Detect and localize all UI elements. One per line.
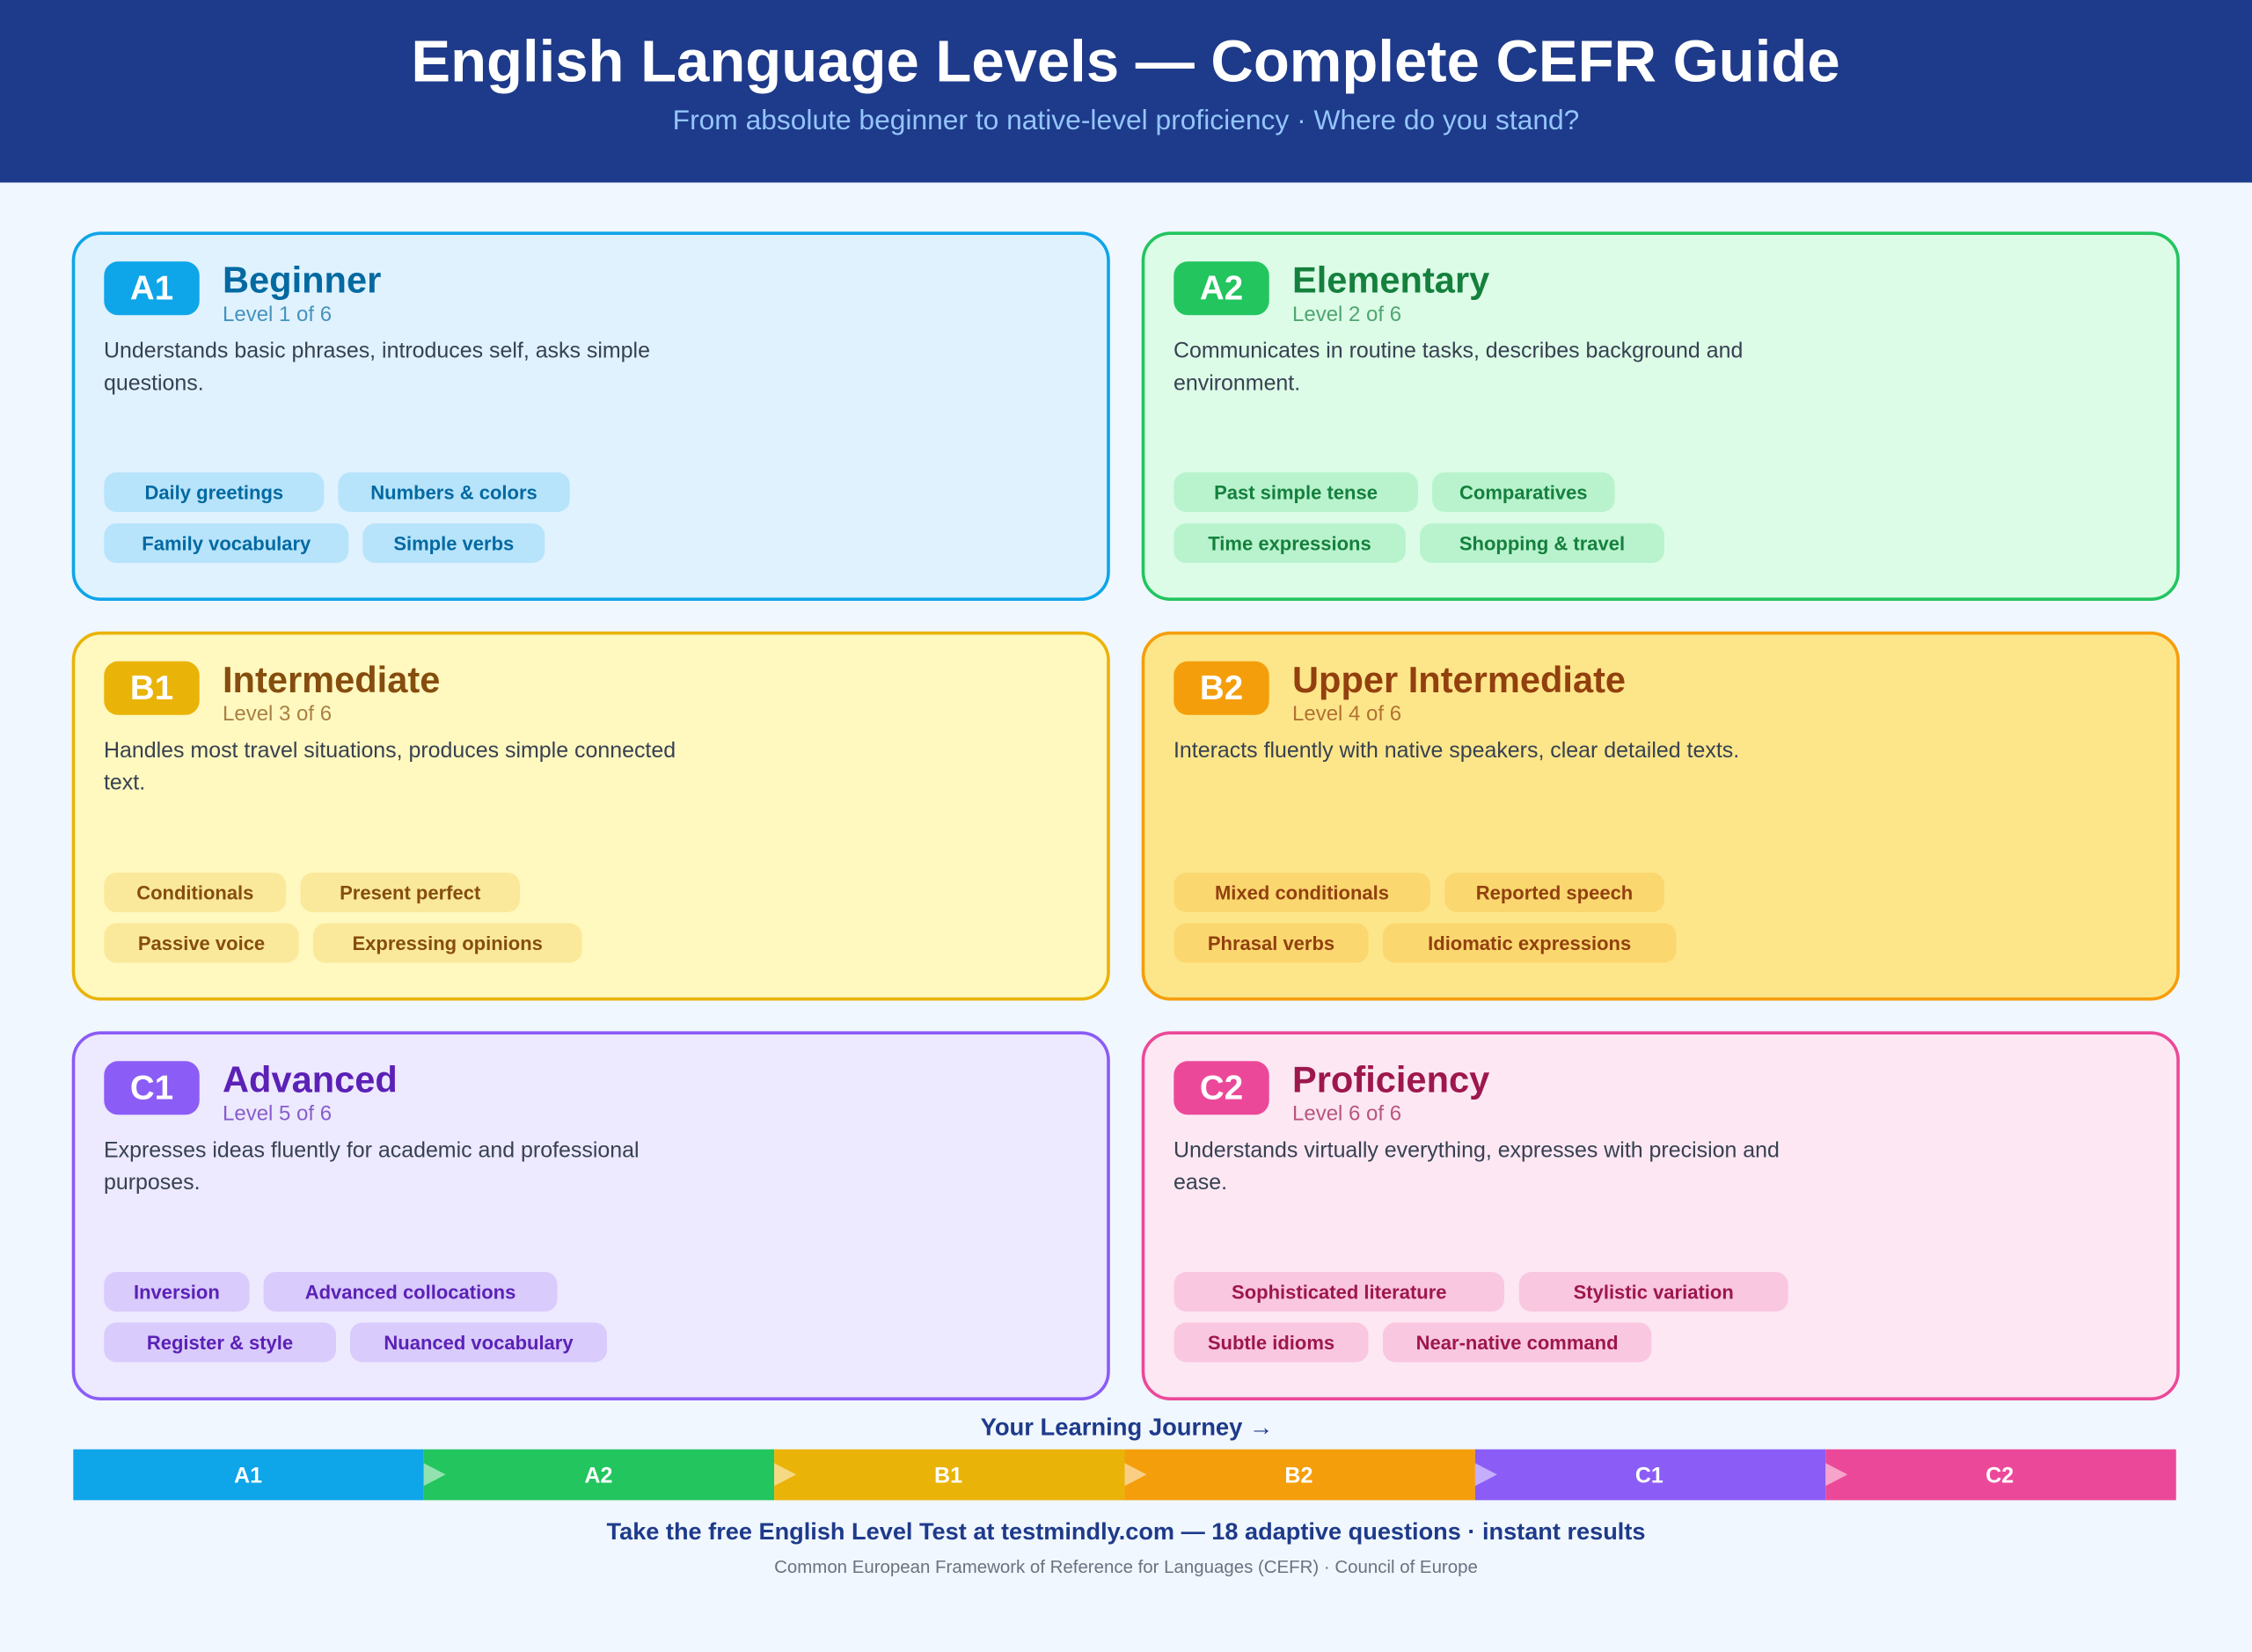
heading: Intermediate: Intermediate <box>223 659 440 700</box>
description: text. <box>104 770 145 794</box>
panel: C2 Proficiency <box>1144 1033 2178 1399</box>
segment: B2: B2 <box>1284 1464 1312 1488</box>
topic tags <box>1174 472 1664 563</box>
topic tags: Expressing opinions <box>353 932 543 954</box>
topic tags: Subtle idioms <box>1208 1332 1334 1354</box>
description: Interacts fluently with native speakers, clear detailed texts. <box>1174 738 1739 763</box>
segment: B1: B1 <box>934 1464 962 1488</box>
arrow: C1 to C2 <box>1825 1463 1847 1486</box>
topic tags: Daily greetings <box>144 482 283 504</box>
badge: B1: B1 <box>130 669 173 707</box>
journey progress bar <box>73 1450 2176 1500</box>
arrow: A1 to A2 <box>424 1463 446 1486</box>
heading: Advanced: Advanced <box>223 1059 398 1100</box>
level label: Level 1 of 6 <box>223 303 332 326</box>
heading: Proficiency: Proficiency <box>1292 1059 1489 1100</box>
badge: A2: A2 <box>1200 270 1243 308</box>
level label: Level 2 of 6 <box>1292 303 1401 326</box>
panel: A2 Elementary <box>1144 233 2178 599</box>
badge: B1 <box>104 662 200 715</box>
arrow: B1 to B2 <box>1124 1463 1147 1486</box>
topic tags: Shopping & travel <box>1459 532 1625 554</box>
topic tags: Phrasal verbs <box>1208 932 1334 954</box>
topic tags: Mixed conditionals <box>1215 881 1389 904</box>
source note: Common European Framework of Reference for Languages (CEFR) · Council of Europe <box>774 1557 1478 1577</box>
topic tags: Sophisticated literature <box>1232 1281 1447 1304</box>
description: Communicates in routine tasks, describes background and <box>1174 339 1743 363</box>
header banner <box>0 0 2252 183</box>
arrow: A2 to B1 <box>774 1463 796 1486</box>
topic tags <box>104 1272 607 1362</box>
topic tags <box>1174 873 1677 962</box>
panel: C1 Advanced <box>74 1033 1108 1399</box>
heading: Upper Intermediate: Upper Intermediate <box>1292 659 1626 700</box>
badge: B2: B2 <box>1200 669 1243 707</box>
heading: Your Learning Journey: Your Learning Journey → <box>981 1414 1273 1441</box>
badge: A2 <box>1174 261 1269 315</box>
topic tags: Advanced collocations <box>305 1281 515 1304</box>
panel: A1 Beginner <box>74 233 1108 599</box>
segment: A1: A1 <box>234 1464 262 1488</box>
topic tags: Idiomatic expressions <box>1428 932 1631 954</box>
topic tags: Time expressions <box>1208 532 1371 554</box>
description: ease. <box>1174 1170 1227 1195</box>
description: questions. <box>104 370 204 395</box>
segment: A2 <box>424 1450 774 1500</box>
badge: C1: C1 <box>130 1070 173 1107</box>
description: Understands virtually everything, expresses with precision and <box>1174 1138 1780 1163</box>
heading: Beginner: Beginner <box>223 259 381 301</box>
badge: C1 <box>104 1061 200 1115</box>
segment: A1 <box>73 1450 424 1500</box>
topic tags: Stylistic variation <box>1574 1281 1734 1304</box>
badge: C2: C2 <box>1200 1070 1243 1107</box>
segment: C2 <box>1825 1450 2176 1500</box>
segment: C1: C1 <box>1635 1464 1663 1488</box>
panel: B2 Upper Intermediate <box>1144 633 2178 999</box>
topic tags: Past simple tense <box>1214 482 1378 504</box>
description: Expresses ideas fluently for academic and professional <box>104 1138 640 1163</box>
heading: Elementary: Elementary <box>1292 259 1489 301</box>
topic tags: Reported speech <box>1476 881 1633 904</box>
topic tags: Family vocabulary <box>142 532 311 554</box>
title: English Language Levels — Complete CEFR Guide <box>411 28 1840 95</box>
topic tags: Comparatives <box>1459 482 1588 504</box>
topic tags: Passive voice <box>138 932 265 954</box>
topic tags <box>1174 1272 1788 1362</box>
topic tags: Simple verbs <box>393 532 514 554</box>
topic tags <box>104 873 582 962</box>
description: purposes. <box>104 1170 201 1195</box>
topic tags: Present perfect <box>340 881 481 904</box>
panel: B1 Intermediate <box>74 633 1108 999</box>
topic tags: Register & style <box>147 1332 293 1354</box>
description: Understands basic phrases, introduces self, asks simple <box>104 339 650 363</box>
badge: A1 <box>104 261 200 315</box>
badge: A1: A1 <box>130 270 173 308</box>
subtitle: From absolute beginner to native-level proficiency · Where do you stand? <box>673 104 1579 135</box>
level label: Level 4 of 6 <box>1292 702 1401 726</box>
description: environment. <box>1174 370 1300 395</box>
arrow: B2 to C1 <box>1475 1463 1497 1486</box>
topic tags: Inversion <box>134 1281 220 1304</box>
segment: C2: C2 <box>1985 1464 2014 1488</box>
level label: Level 6 of 6 <box>1292 1101 1401 1126</box>
description: Handles most travel situations, produces simple connected <box>104 738 676 763</box>
badge: B2 <box>1174 662 1269 715</box>
segment: B1 <box>774 1450 1124 1500</box>
level label: Level 5 of 6 <box>223 1101 332 1126</box>
segment: A2: A2 <box>584 1464 612 1488</box>
topic tags: Conditionals <box>136 881 253 904</box>
topic tags: Near-native command <box>1416 1332 1619 1354</box>
level label: Level 3 of 6 <box>223 702 332 726</box>
segment: B2 <box>1124 1450 1475 1500</box>
call to action: Take the free English Level Test at testmindly.com — 18 adaptive questions · instant results <box>607 1517 1645 1545</box>
badge: C2 <box>1174 1061 1269 1115</box>
topic tags: Nuanced vocabulary <box>384 1332 574 1354</box>
segment: C1 <box>1475 1450 1825 1500</box>
topic tags <box>104 472 570 563</box>
topic tags: Numbers & colors <box>370 482 537 504</box>
